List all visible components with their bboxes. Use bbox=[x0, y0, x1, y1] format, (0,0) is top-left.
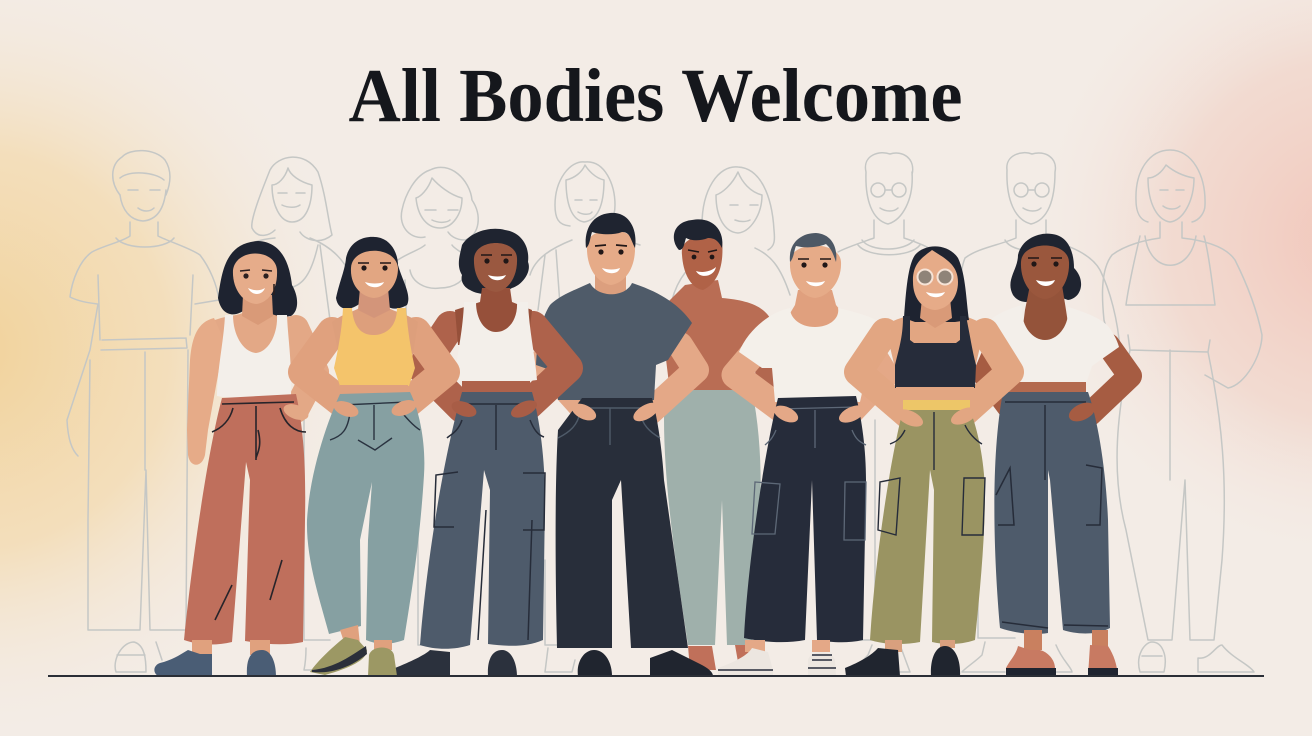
face features bbox=[1028, 258, 1062, 286]
cargo pants bbox=[994, 392, 1110, 634]
face bbox=[790, 246, 841, 298]
ankles bbox=[885, 640, 955, 652]
shoes bbox=[395, 650, 517, 676]
ankles bbox=[340, 625, 392, 650]
yellow crop top bbox=[334, 308, 415, 386]
left arm bbox=[187, 318, 224, 465]
figure: woman in white tee and cargo trousers on the right bbox=[985, 234, 1130, 676]
far arm bbox=[985, 340, 1015, 415]
hair bbox=[336, 237, 408, 309]
arm bbox=[760, 325, 768, 385]
salmon shoes bbox=[1006, 645, 1118, 676]
title: All Bodies Welcome bbox=[348, 54, 962, 138]
hair bbox=[674, 219, 722, 250]
figure: woman in yellow top and teal pants bbox=[303, 237, 445, 676]
trouser details bbox=[558, 408, 660, 445]
left arm bbox=[422, 326, 462, 408]
shoulders bbox=[885, 312, 985, 368]
outline figure 4: woman with long hair bbox=[530, 162, 640, 672]
face features bbox=[798, 259, 831, 286]
teal pants bbox=[307, 392, 424, 644]
shoe soles bbox=[1006, 668, 1118, 676]
navy trousers bbox=[556, 398, 688, 648]
far arm bbox=[296, 328, 316, 410]
neck bbox=[595, 265, 626, 299]
shoes bbox=[578, 650, 713, 676]
ankles bbox=[745, 640, 830, 652]
outline figure 5: woman with side-parted hair bbox=[672, 167, 790, 300]
shoe laces bbox=[718, 655, 836, 670]
outline figure 2: woman with wavy hair bbox=[225, 157, 345, 670]
hands bbox=[569, 399, 662, 425]
grey t-shirt bbox=[536, 283, 692, 400]
white tee bbox=[739, 308, 885, 402]
face bbox=[1021, 246, 1069, 299]
facial features bbox=[240, 270, 274, 295]
background outline figures bbox=[67, 150, 1262, 672]
figure: woman with glasses in black top and olive pants bbox=[845, 246, 1010, 676]
ankles bbox=[1024, 630, 1108, 650]
figure: woman with curly hair in white top bbox=[395, 229, 568, 676]
shoes bbox=[154, 650, 276, 676]
midriff bbox=[1006, 382, 1086, 393]
white crop top bbox=[217, 315, 291, 399]
yellow waistband bbox=[903, 400, 970, 411]
hands bbox=[894, 404, 980, 430]
shoulders bbox=[332, 306, 418, 360]
left forearm bbox=[540, 362, 585, 412]
face features bbox=[595, 245, 627, 273]
figure: man in sage pants behind bbox=[660, 219, 772, 670]
white tee bbox=[990, 305, 1119, 386]
midriff bbox=[896, 387, 974, 401]
long hair bbox=[904, 246, 969, 322]
hands bbox=[449, 397, 540, 421]
outline figure 1: man in t-shirt bbox=[67, 151, 219, 672]
outline figure 7: man with glasses bbox=[960, 153, 1120, 672]
outline figure 3: woman with curly hair bbox=[395, 167, 478, 645]
shoe stripe bbox=[312, 646, 367, 672]
pants details bbox=[996, 402, 1108, 628]
ankles bbox=[192, 640, 270, 656]
head bbox=[587, 230, 635, 285]
hair bbox=[218, 241, 297, 317]
face bbox=[233, 254, 277, 304]
right forearm bbox=[650, 345, 696, 412]
neck and chest bbox=[1020, 285, 1072, 350]
pants details bbox=[878, 412, 985, 535]
navy trousers bbox=[744, 396, 866, 642]
figure: man with grey hair in white tee bbox=[718, 233, 885, 676]
neck bbox=[920, 298, 952, 328]
face bbox=[474, 243, 517, 292]
neck and chest bbox=[455, 288, 532, 345]
hands bbox=[771, 402, 868, 426]
white shoes bbox=[718, 648, 836, 676]
white top bbox=[454, 302, 537, 383]
pants details bbox=[330, 402, 420, 450]
neck bbox=[242, 295, 273, 325]
hair bbox=[586, 213, 636, 248]
hand on hip bbox=[281, 401, 311, 423]
hair bbox=[1010, 234, 1081, 302]
face features bbox=[688, 250, 717, 276]
neck and chest bbox=[786, 290, 848, 329]
olive shoes bbox=[310, 637, 397, 676]
slate cargo trousers bbox=[420, 392, 545, 649]
arms bbox=[303, 332, 445, 405]
shoe bbox=[688, 645, 750, 670]
right arm bbox=[525, 326, 568, 408]
arms bbox=[735, 350, 885, 412]
midriff bbox=[462, 381, 530, 394]
face features bbox=[481, 255, 512, 280]
grey hair bbox=[790, 233, 836, 262]
hand bbox=[1066, 399, 1098, 425]
neck bbox=[358, 288, 390, 318]
face bbox=[351, 251, 398, 298]
trouser details bbox=[752, 407, 866, 540]
figure: man in grey tee and navy trousers bbox=[536, 213, 713, 676]
black crop top bbox=[895, 316, 976, 388]
arms bbox=[858, 332, 1010, 415]
head bbox=[682, 237, 722, 290]
midriff bbox=[340, 385, 408, 397]
outline figure 8: woman in crop top bbox=[1102, 150, 1262, 672]
trouser details bbox=[434, 404, 545, 640]
round glasses bbox=[918, 270, 952, 284]
dark shoes bbox=[845, 646, 960, 676]
bare torso bbox=[660, 280, 772, 392]
outline figure 6: man with glasses bbox=[838, 153, 940, 672]
smile bbox=[926, 292, 945, 297]
ground line bbox=[48, 675, 1264, 677]
curly hair bbox=[459, 229, 529, 294]
pants seams and pockets bbox=[212, 402, 306, 620]
face bbox=[913, 250, 958, 310]
hands bbox=[331, 397, 419, 420]
figure: woman in white top and terracotta pants bbox=[154, 241, 316, 676]
face features bbox=[358, 263, 391, 287]
right forearm bbox=[1090, 345, 1130, 414]
terracotta pants bbox=[184, 394, 305, 644]
olive pants bbox=[870, 410, 985, 644]
shoulders and chest bbox=[210, 312, 308, 375]
sage pants bbox=[664, 390, 761, 645]
